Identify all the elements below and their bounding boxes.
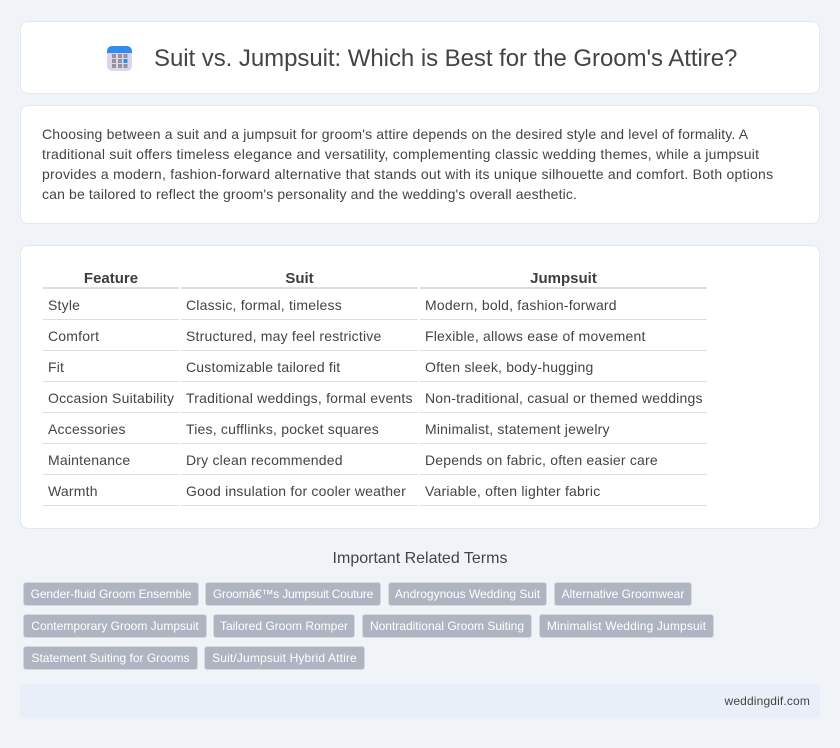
panel: comparison table <box>20 245 820 529</box>
related term tags <box>23 582 714 670</box>
related term tags: Statement Suiting for Grooms <box>31 651 190 665</box>
comparison table: Occasion Suitability <box>48 390 174 406</box>
comparison table: Customizable tailored fit <box>186 359 340 375</box>
comparison table: Fit <box>48 359 64 375</box>
intro text: provides a modern, fashion-forward alternative that stands out with its unique silhouette and comfort. Both options <box>42 166 773 182</box>
comparison table: Suit <box>285 270 314 287</box>
intro text: traditional suit offers timeless elegance and versatility, complementing classic wedding themes, while a jumpsuit <box>42 146 759 162</box>
comparison table: Structured, may feel restrictive <box>186 328 381 344</box>
comparison table <box>43 270 707 506</box>
comparison table: Depends on fabric, often easier care <box>425 452 658 468</box>
intro text: Choosing between a suit and a jumpsuit for groom's attire depends on the desired style and level of formality. A <box>42 126 748 142</box>
footer bar <box>20 684 820 718</box>
heading: related terms: Important Related Terms <box>333 550 507 567</box>
title: Suit vs. Jumpsuit: Which is Best for the Groom's Attire? <box>154 45 737 72</box>
comparison table: Accessories <box>48 421 126 437</box>
icon: calendar <box>107 46 132 71</box>
comparison table: Variable, often lighter fabric <box>425 483 600 499</box>
comparison table: Maintenance <box>48 452 130 468</box>
related term tags: Tailored Groom Romper <box>220 619 348 633</box>
related term tags: Groomâ€™s Jumpsuit Couture <box>213 587 373 601</box>
comparison table: Non-traditional, casual or themed weddings <box>425 390 703 406</box>
panel: title header <box>20 21 820 94</box>
comparison table: Flexible, allows ease of movement <box>425 328 646 344</box>
related term tags: Gender-fluid Groom Ensemble <box>31 587 191 601</box>
comparison table: Traditional weddings, formal events <box>186 390 413 406</box>
intro text <box>42 126 773 202</box>
intro text: can be tailored to reflect the groom's personality and the wedding's overall aesthetic. <box>42 186 577 202</box>
related term tags: Nontraditional Groom Suiting <box>370 619 524 633</box>
comparison table: Feature <box>84 270 138 287</box>
related term tags: Androgynous Wedding Suit <box>395 587 540 601</box>
comparison table: Modern, bold, fashion-forward <box>425 297 617 313</box>
comparison table: Good insulation for cooler weather <box>186 483 406 499</box>
comparison table: Often sleek, body-hugging <box>425 359 593 375</box>
related term tags: Minimalist Wedding Jumpsuit <box>547 619 706 633</box>
comparison table: Classic, formal, timeless <box>186 297 342 313</box>
related term tags: Alternative Groomwear <box>562 587 684 601</box>
comparison table: Dry clean recommended <box>186 452 343 468</box>
comparison table: Comfort <box>48 328 99 344</box>
comparison table: Ties, cufflinks, pocket squares <box>186 421 379 437</box>
related term tags: Contemporary Groom Jumpsuit <box>31 619 199 633</box>
comparison table: Warmth <box>48 483 98 499</box>
panel: introduction <box>20 105 820 224</box>
comparison table: Style <box>48 297 80 313</box>
footer source: weddingdif.com <box>725 694 810 708</box>
comparison table: Minimalist, statement jewelry <box>425 421 610 437</box>
comparison table: Jumpsuit <box>530 270 597 287</box>
related term tags: Suit/Jumpsuit Hybrid Attire <box>212 651 357 665</box>
